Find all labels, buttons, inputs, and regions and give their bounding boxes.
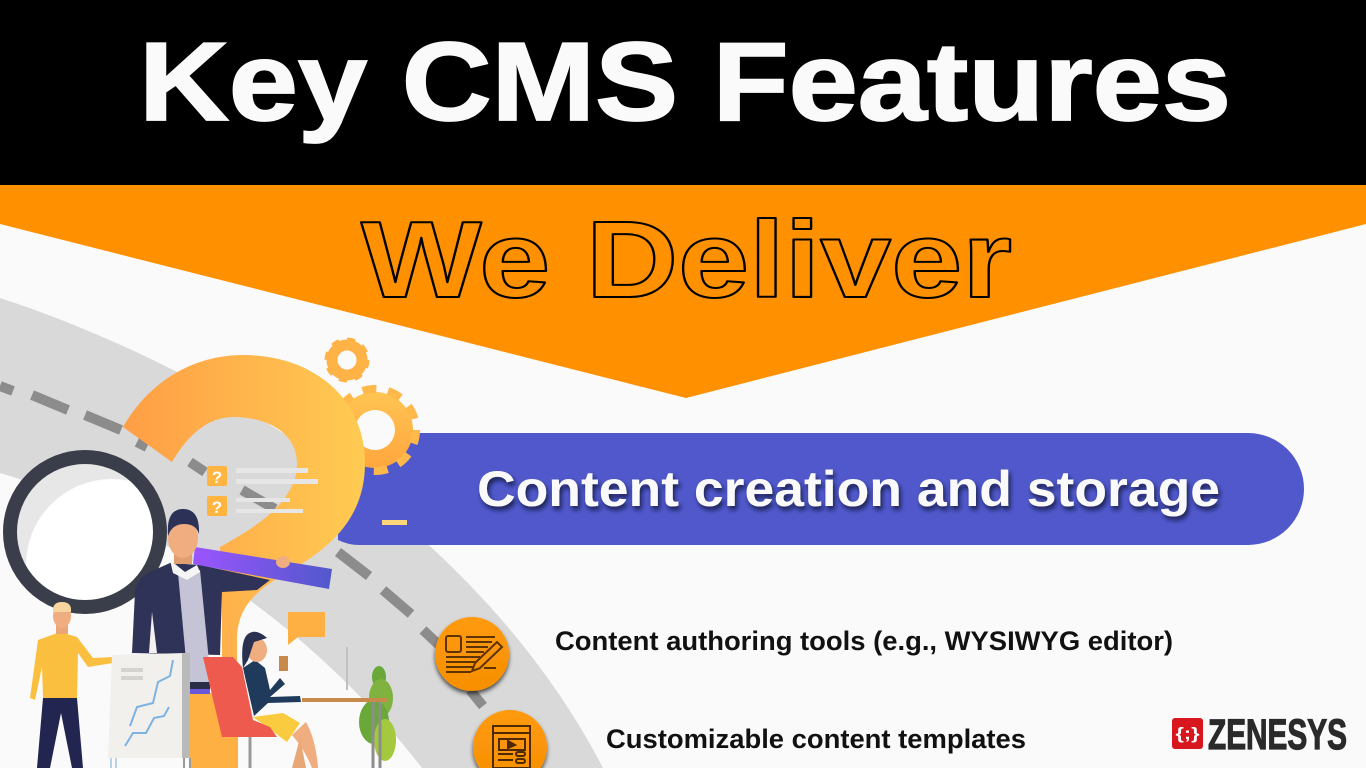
yellow dash on pill: [382, 520, 407, 525]
large yellow gear: [334, 389, 416, 471]
blue heading pill background: [338, 433, 1304, 545]
feature text 2: Customizable content templates: [606, 724, 1026, 754]
orange chevron banner: [0, 185, 1366, 398]
man in yellow sweater: [30, 602, 128, 768]
question list inside the question mark: ?: [212, 468, 222, 487]
icon: content authoring: [435, 617, 509, 691]
question list inside the question mark: ?: [212, 498, 222, 517]
icon: content templates: [473, 710, 547, 768]
feature text 1: Content authoring tools (e.g., WYSIWYG editor): [555, 626, 1173, 656]
seated woman at desk: [203, 632, 387, 768]
section heading: Content creation and storage: [477, 461, 1220, 517]
title: Key CMS Features: [139, 20, 1231, 144]
magnifying glass: [3, 450, 167, 614]
question mark shape: [123, 355, 365, 700]
flip chart with line graph: [108, 653, 190, 768]
question list inside the question mark: [207, 466, 318, 517]
banner heading: We Deliver: We Deliver: [361, 199, 1012, 321]
logo: Zenesys: {;}: [1176, 724, 1200, 743]
man with purple bar: [132, 509, 332, 768]
small yellow gear: [327, 340, 367, 380]
black title band: [0, 0, 1366, 185]
plant: [359, 666, 396, 761]
grey curved road: [0, 298, 603, 768]
speech bubble: [288, 612, 325, 645]
